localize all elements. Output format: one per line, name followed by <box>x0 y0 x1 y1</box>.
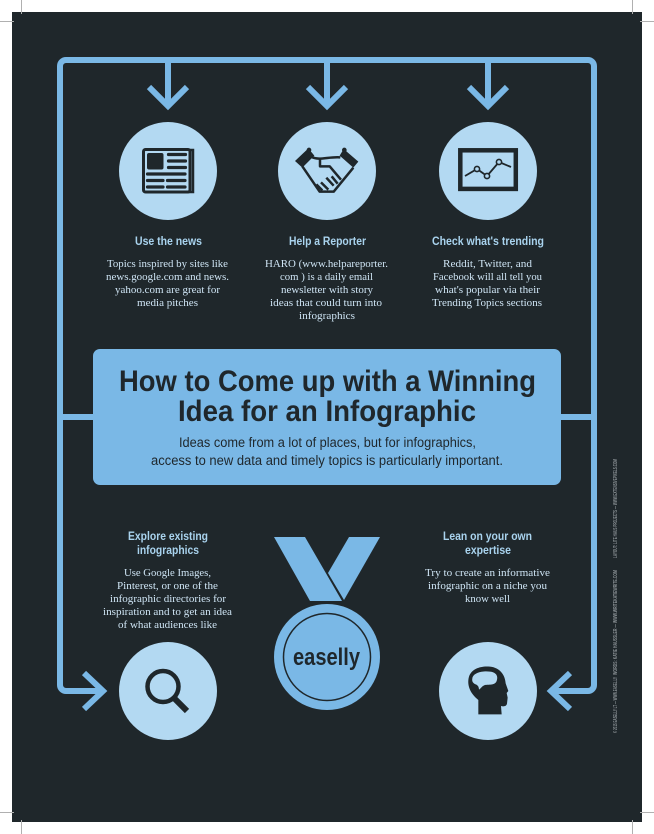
text block: explore existing infographics: infographics <box>137 545 199 557</box>
frame line <box>60 60 594 691</box>
title: Idea for an Infographic <box>178 395 476 428</box>
arrow: explore <box>84 673 103 709</box>
icon: handshake <box>278 122 376 220</box>
medal: easelly logo: easelly <box>293 644 361 671</box>
text block: use the news: news.google.com and news. <box>106 271 229 283</box>
text block: help a reporter <box>265 236 388 322</box>
text block: check what's trending: Trending Topics sections <box>432 297 542 309</box>
text block: explore existing infographics: infographic directories for <box>110 593 226 605</box>
subtitle: Ideas come from a lot of places, but for infographics, <box>179 435 476 450</box>
arrow: reporter <box>308 60 346 106</box>
text block: check what's trending: Reddit, Twitter, and <box>443 258 533 270</box>
icon: trend chart <box>439 122 537 220</box>
text block: use the news: Topics inspired by sites like <box>107 258 228 270</box>
text block: use the news: media pitches <box>137 297 198 309</box>
text block: use the news: Use the news <box>135 236 202 248</box>
text block: check what's trending: what's popular via their <box>435 284 540 296</box>
icon: newspaper <box>119 122 217 220</box>
side credits: WORDS: KATIE HAUSSLER — WWW.WRITEKATIEWRITE.COM <box>613 570 619 675</box>
text block: explore existing infographics: Pinterest, or one of the <box>117 580 218 592</box>
text block: help a reporter: com ) is a daily email <box>280 271 373 283</box>
arrow: trending <box>469 60 507 106</box>
arrow: expertise <box>551 673 570 709</box>
panel connector lines <box>60 414 594 420</box>
text block: check what's trending: Check what's trending <box>432 236 544 248</box>
text block: help a reporter: HARO (www.helpareporter. <box>265 258 388 270</box>
arrow: news <box>149 60 187 106</box>
text block: explore existing infographics: inspiration and to get an idea <box>103 606 232 618</box>
text block: use the news: yahoo.com are great for <box>115 284 220 296</box>
icon: head with thought bubble <box>439 642 537 740</box>
subtitle: access to new data and timely topics is particularly important. <box>151 453 503 468</box>
text block: help a reporter: ideas that could turn into <box>270 297 383 309</box>
text block: check what's trending: Facebook will all tell you <box>433 271 542 283</box>
text block: lean on your own expertise <box>425 531 550 605</box>
text block: explore existing infographics: of what audiences like <box>118 619 217 631</box>
side credits <box>612 459 619 733</box>
text block: lean on your own expertise: Try to create an informative <box>425 567 550 579</box>
medal: easelly logo <box>274 537 380 710</box>
side credits: LAYOUT: LITE HAUS PROJECTS — WWW.EXTENSIVEPIXELS.COM <box>613 459 619 558</box>
text block: explore existing infographics: Use Google Images, <box>124 567 211 579</box>
icon: magnifying glass <box>119 642 217 740</box>
text block: use the news <box>106 236 229 309</box>
side credits: © 2015 EASELLY LT — WWW.EASEL.LY <box>612 677 619 733</box>
title <box>119 365 536 428</box>
text block: lean on your own expertise: infographic on a niche you <box>428 580 548 592</box>
subtitle <box>151 435 503 468</box>
text block: help a reporter: infographics <box>299 310 355 322</box>
text block: lean on your own expertise: know well <box>465 593 510 605</box>
connector frame with arrows <box>60 60 594 709</box>
text block: check what's trending <box>432 236 544 309</box>
text block: explore existing infographics <box>103 531 232 631</box>
text block: help a reporter: newsletter with story <box>281 284 373 296</box>
text block: help a reporter: Help a Reporter <box>289 236 366 248</box>
title: How to Come up with a Winning <box>119 365 536 398</box>
text block: explore existing infographics: Explore existing <box>128 531 208 543</box>
panel: title <box>93 349 561 485</box>
text block: lean on your own expertise: Lean on your own <box>443 531 532 543</box>
text block: lean on your own expertise: expertise <box>465 545 511 557</box>
